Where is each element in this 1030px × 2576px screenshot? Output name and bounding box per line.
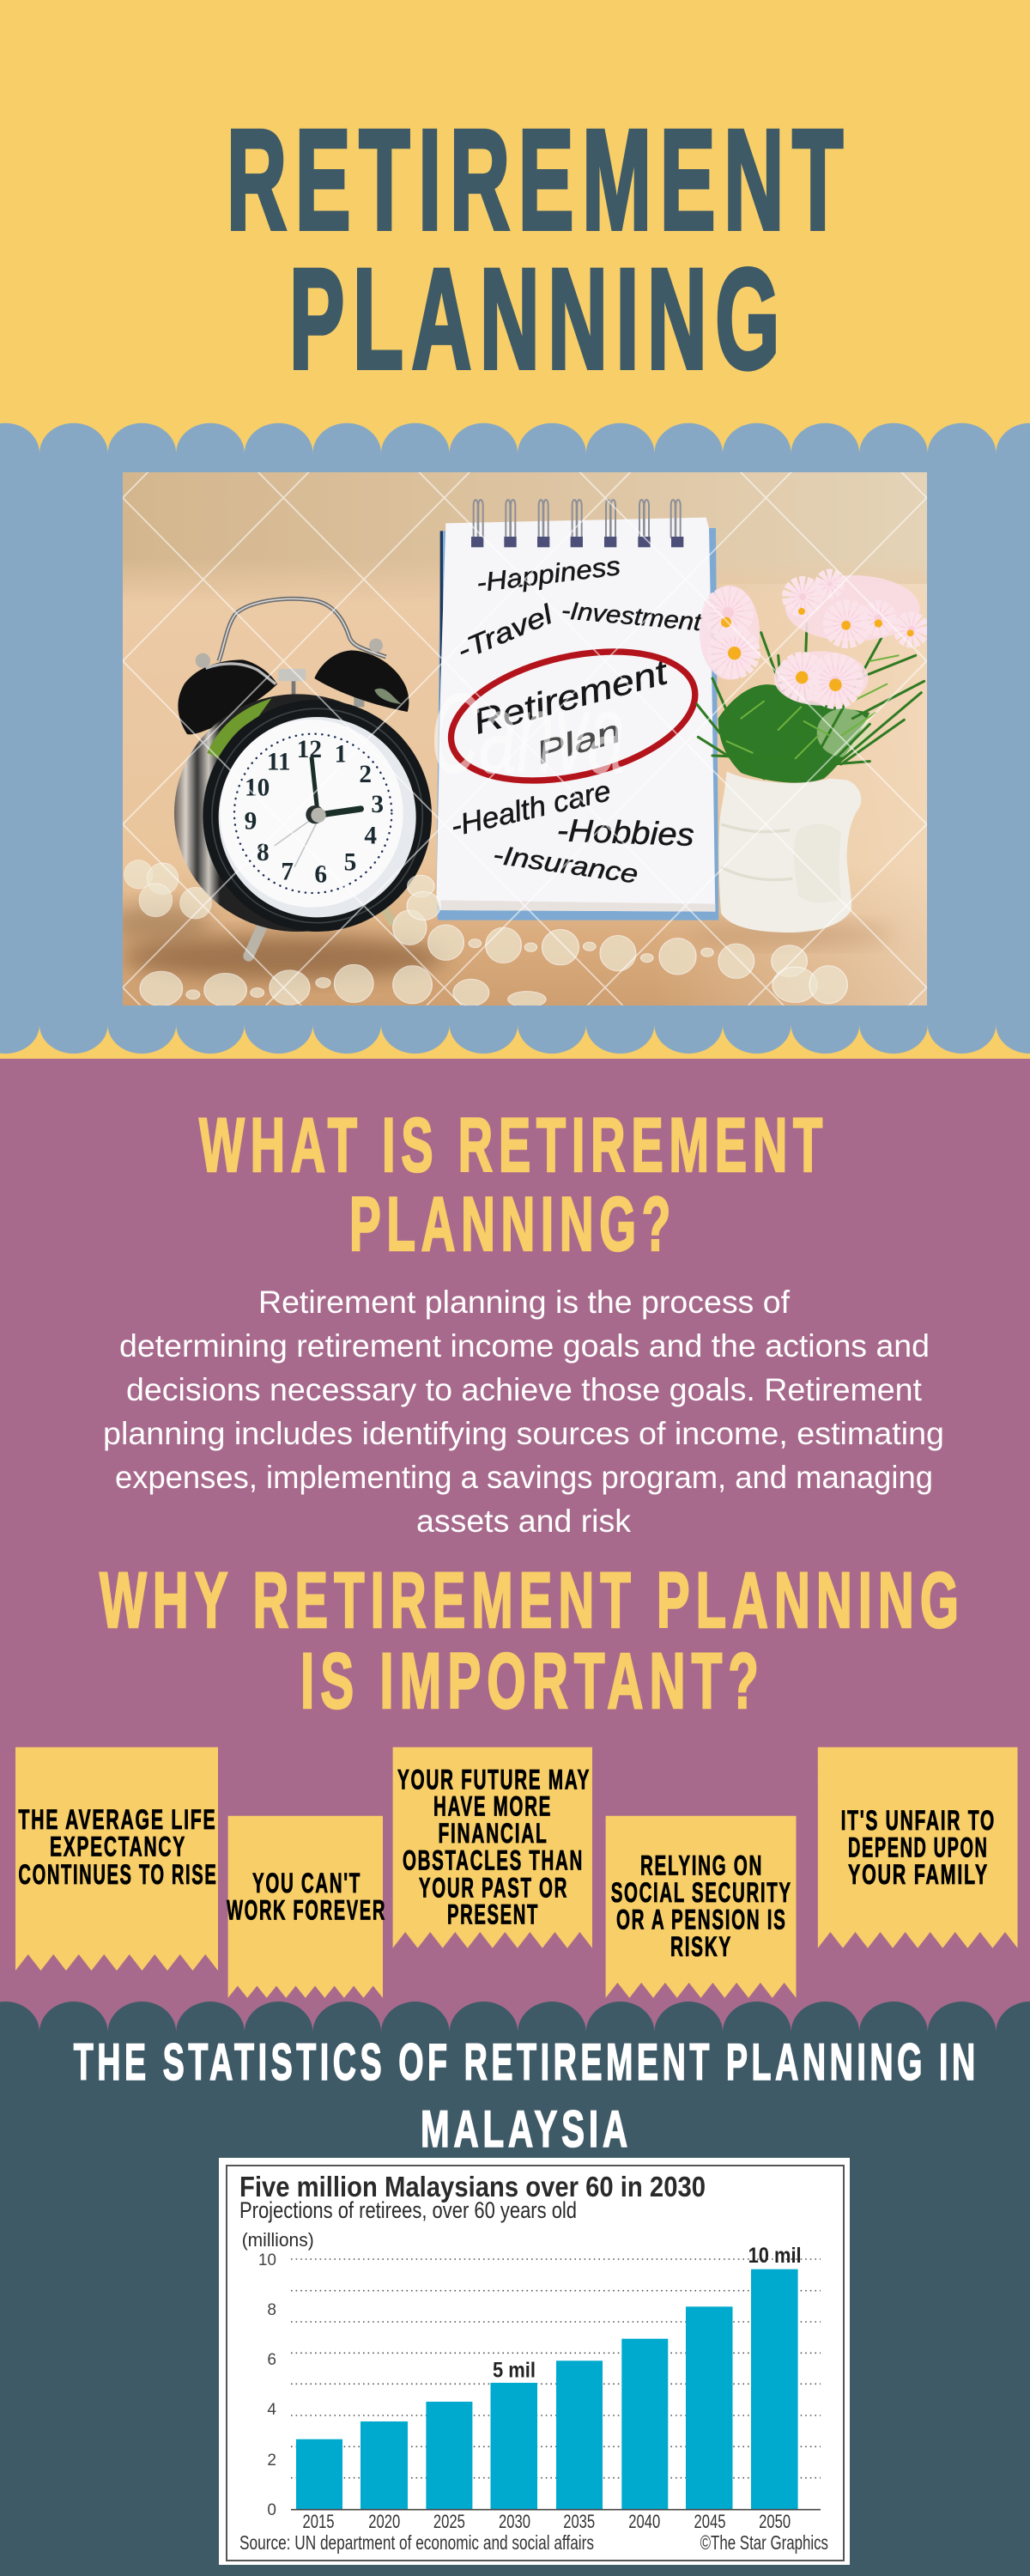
notepad with handwritten list: -Health care xyxy=(448,775,614,843)
banner: social security xyxy=(606,1816,797,1998)
y axis labels xyxy=(258,2251,276,2519)
x axis labels: 2025 xyxy=(433,2511,465,2532)
y axis labels: 2 xyxy=(267,2451,276,2470)
text block: definition: expenses, implementing a savings program, and managing xyxy=(115,1460,933,1495)
text block: definition: assets and risk xyxy=(416,1504,631,1539)
banner: life expectancy: EXPECTANCY xyxy=(50,1832,186,1862)
text block: definition: decisions necessary to achieve those goals. Retirement xyxy=(126,1372,923,1407)
banner: financial obstacles: YOUR PAST OR xyxy=(419,1872,568,1903)
banner: life expectancy: THE AVERAGE LIFE xyxy=(18,1804,216,1835)
title xyxy=(227,101,851,398)
banner: work forever xyxy=(227,1816,386,1998)
panel: purple section xyxy=(0,1059,1030,2038)
notepad with handwritten list xyxy=(431,500,718,920)
chart subtitle: Projections of retirees, over 60 years old xyxy=(239,2197,577,2223)
icon: alarm clock: 5 xyxy=(344,848,356,876)
x axis labels: 2015 xyxy=(302,2511,335,2532)
notepad with handwritten list: Plan xyxy=(532,713,625,771)
notepad with handwritten list: -Investment xyxy=(560,597,703,636)
panel: yellow title background xyxy=(0,0,1030,1065)
banner: work forever: WORK FOREVER xyxy=(227,1895,386,1926)
notepad with handwritten list: Canva xyxy=(431,670,625,798)
icon: alarm clock: 11 xyxy=(267,749,291,776)
banner: financial obstacles: PRESENT xyxy=(447,1899,539,1930)
icon: alarm clock: 6 xyxy=(314,861,327,889)
banner: financial obstacles: YOUR FUTURE MAY xyxy=(397,1764,591,1795)
bar callouts: 5 mil xyxy=(493,2359,536,2383)
photo: alarm clock, notepad and flowers xyxy=(107,472,927,1007)
banner: social security: OR A PENSION IS xyxy=(616,1904,786,1935)
heading: what is retirement planning xyxy=(199,1102,828,1267)
y axis labels: 8 xyxy=(267,2301,276,2319)
panel: blue photo band with scalloped edges xyxy=(0,423,1030,1054)
notepad with handwritten list: Retirement xyxy=(469,652,673,742)
heading: statistics: MALAYSIA xyxy=(421,2100,632,2158)
bar callouts: 10 mil xyxy=(748,2244,802,2268)
banner: depend on family xyxy=(818,1747,1018,1948)
y axis labels: 4 xyxy=(267,2401,276,2419)
banner: life expectancy: CONTINUES TO RISE xyxy=(18,1859,217,1890)
icon: alarm clock: 2 xyxy=(359,761,372,788)
banner: life expectancy xyxy=(15,1747,218,1971)
vase with flowers xyxy=(697,575,924,933)
notepad with handwritten list: -Insurance xyxy=(491,840,639,890)
banner: social security: RELYING ON xyxy=(640,1850,763,1880)
icon: alarm clock: 9 xyxy=(245,807,257,835)
panel: dark statistics section xyxy=(0,2002,1030,2576)
text block: definition: planning includes identifying sources of income, estimating xyxy=(103,1416,944,1451)
x axis labels: 2050 xyxy=(759,2511,791,2532)
banner: financial obstacles: OBSTACLES THAN xyxy=(403,1845,584,1876)
heading: why retirement planning is important xyxy=(100,1557,965,1725)
pearl beads xyxy=(140,875,847,1007)
icon: alarm clock: 12 xyxy=(297,736,322,763)
icon: alarm clock: 8 xyxy=(257,839,270,866)
text block: definition xyxy=(103,1285,944,1539)
icon: alarm clock: 7 xyxy=(281,858,294,885)
heading: why retirement planning is important: IS IMPORTANT? xyxy=(300,1637,765,1725)
x axis labels: 2030 xyxy=(499,2511,530,2532)
heading: what is retirement planning: PLANNING? xyxy=(349,1181,676,1267)
banner: social security: RISKY xyxy=(670,1931,732,1962)
banner: financial obstacles: HAVE MORE xyxy=(433,1791,552,1822)
bar callouts xyxy=(493,2244,802,2383)
heading: statistics xyxy=(74,2033,979,2158)
y axis labels: 0 xyxy=(267,2501,276,2519)
y axis unit: (millions) xyxy=(242,2229,314,2251)
icon: alarm clock: 4 xyxy=(364,823,377,850)
y axis labels: 6 xyxy=(267,2351,276,2369)
text block: definition: determining retirement income goals and the actions and xyxy=(119,1328,930,1364)
notepad with handwritten list: -Travel xyxy=(452,598,557,666)
x axis labels: 2040 xyxy=(628,2511,660,2532)
banner: work forever: YOU CAN'T xyxy=(252,1868,361,1899)
banner: financial obstacles: FINANCIAL xyxy=(438,1818,548,1849)
banner: financial obstacles xyxy=(393,1747,592,1948)
x axis labels: 2045 xyxy=(694,2511,726,2532)
icon: alarm clock: 3 xyxy=(371,791,384,818)
credit note: ©The Star Graphics xyxy=(700,2531,828,2554)
x axis labels xyxy=(302,2511,791,2532)
bar chart: projections of retirees xyxy=(219,2158,850,2565)
bars xyxy=(296,2269,798,2510)
source note: Source: UN department of economic and social affairs xyxy=(239,2531,594,2554)
banner: social security: SOCIAL SECURITY xyxy=(611,1877,792,1908)
icon: alarm clock: 1 xyxy=(335,741,347,769)
x axis labels: 2020 xyxy=(368,2511,400,2532)
icon: alarm clock xyxy=(124,598,432,956)
x axis labels: 2035 xyxy=(563,2511,595,2532)
text block: definition: Retirement planning is the process of xyxy=(258,1285,791,1320)
y axis labels: 10 xyxy=(258,2251,276,2269)
icon: alarm clock: 10 xyxy=(245,775,270,802)
chart title: Five million Malaysians over 60 in 2030 xyxy=(239,2171,706,2202)
notepad with handwritten list: -Hobbies xyxy=(556,811,694,853)
notepad with handwritten list: -Happiness xyxy=(475,551,622,598)
